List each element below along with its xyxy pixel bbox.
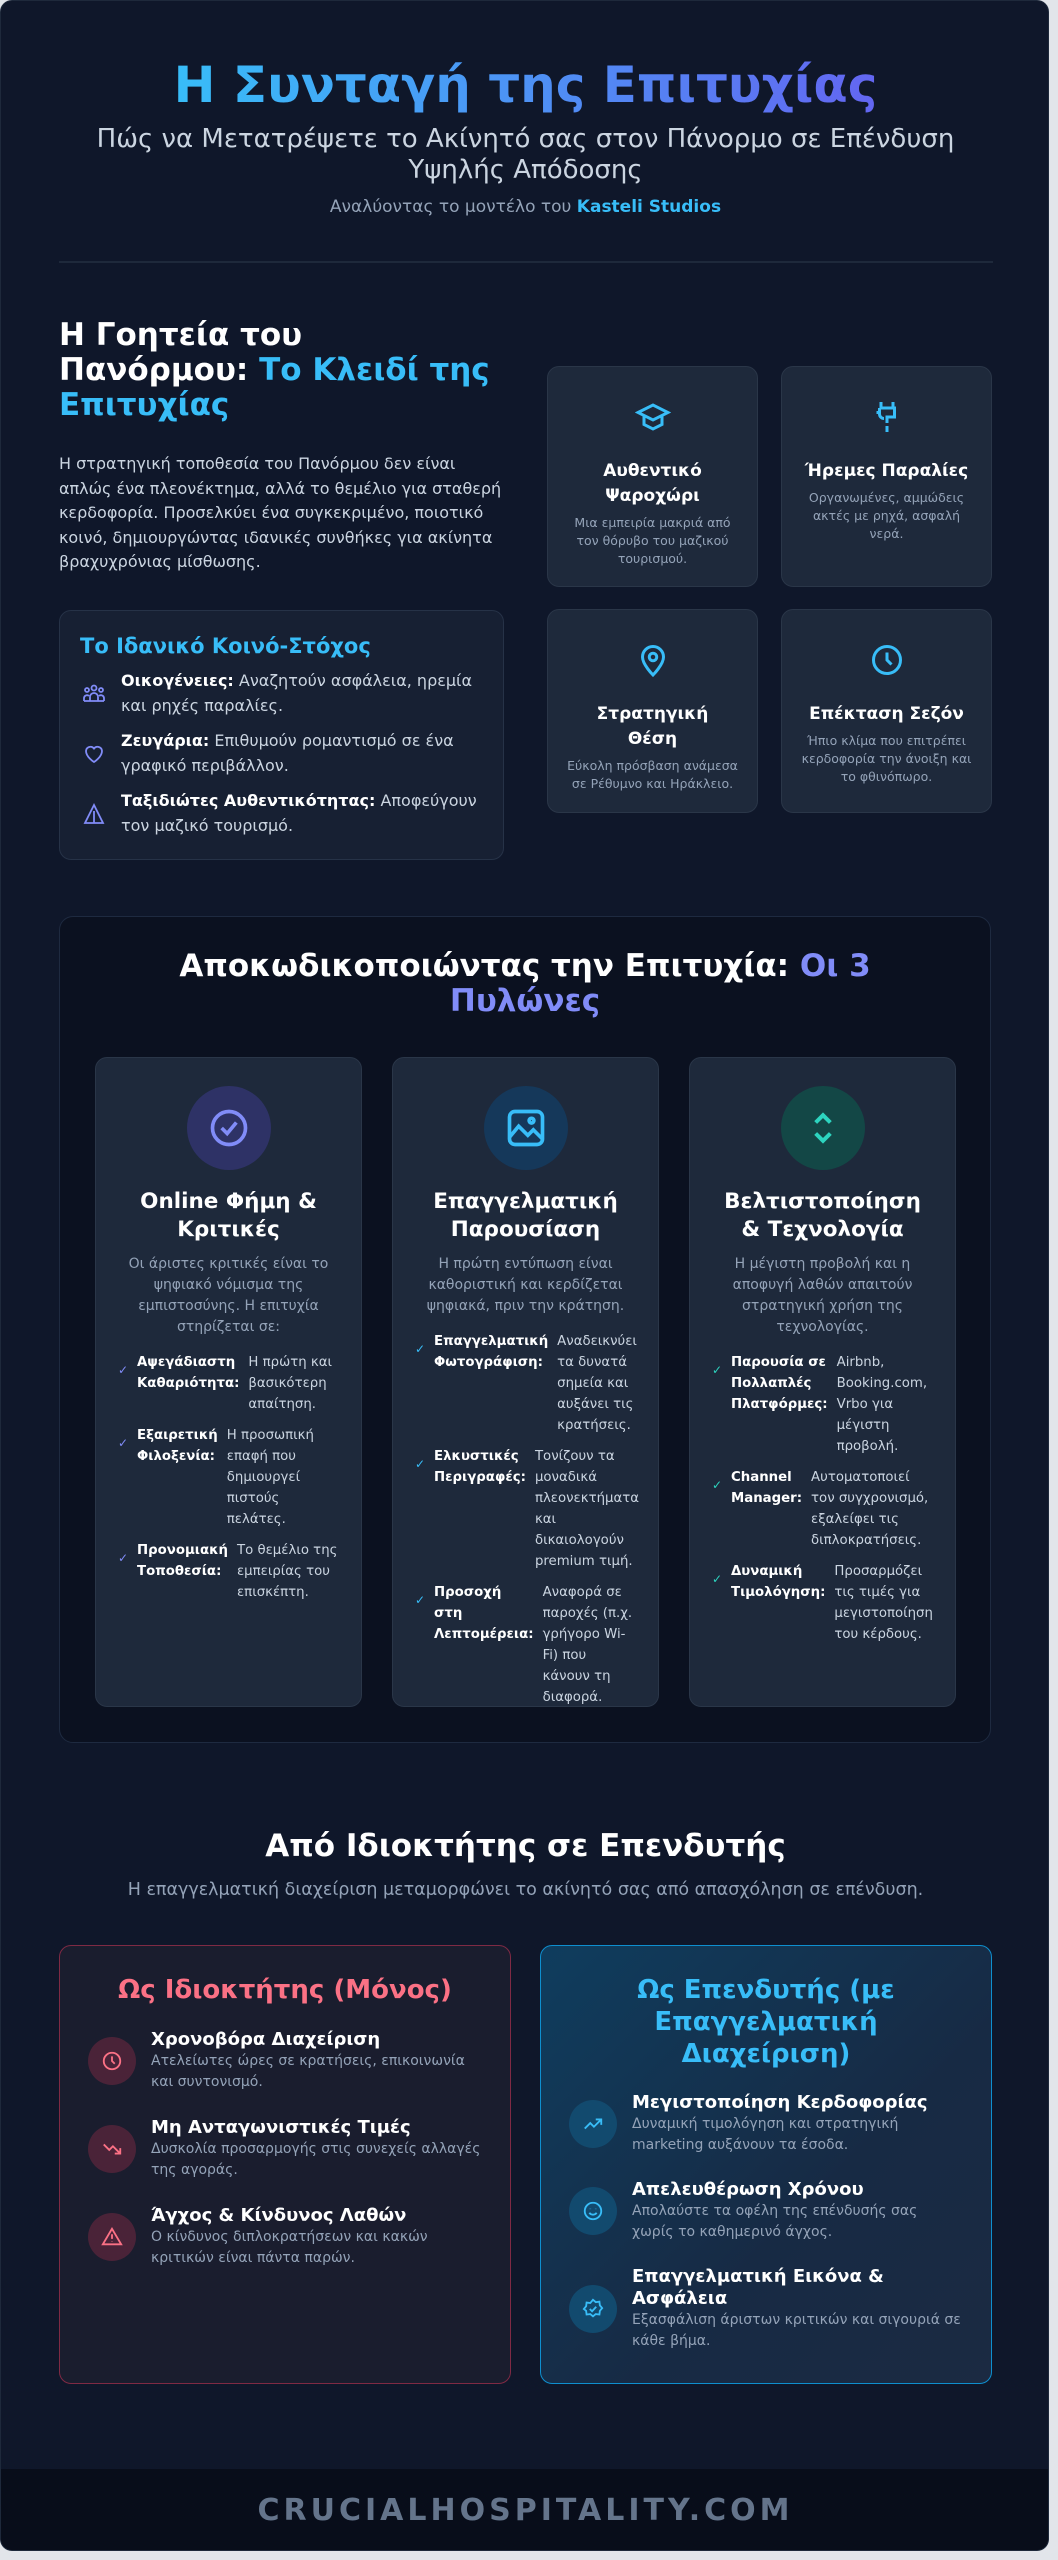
- pillar: technology: Δυναμική Τιμολόγηση:: [731, 1564, 825, 1600]
- item: prices: Δυσκολία προσαρμογής στις συνεχείς αλλαγές της αγοράς.: [151, 2141, 480, 2178]
- item: free time: Απελευθέρωση Χρόνου: [632, 2179, 864, 2200]
- item: free time: [569, 2179, 917, 2240]
- pillar: presentation: [392, 1057, 659, 1707]
- item: time consuming: Ατελείωτες ώρες σε κρατήσεις, επικοινωνία και συντονισμό.: [151, 2053, 465, 2090]
- pillar: presentation: ✓: [415, 1342, 425, 1356]
- card: authentic village: Αυθεντικό Ψαροχώρι: [603, 461, 702, 506]
- icon: cap: [635, 403, 671, 431]
- pillar: presentation: ✓: [415, 1593, 425, 1607]
- pillar: reputation: Η προσωπική επαφή που δημιουργεί πιστούς πελάτες.: [227, 1428, 314, 1527]
- card: authentic village: [547, 366, 758, 587]
- icon: image: [484, 1086, 568, 1170]
- heading: owner to investor: Από Ιδιοκτήτης σε Επενδυτής: [265, 1828, 786, 1864]
- pillar: technology: ✓: [712, 1572, 722, 1586]
- item: image & safety: [569, 2266, 961, 2349]
- pillar: technology: Channel Manager:: [731, 1470, 802, 1506]
- item: authentic travellers: Ταξιδιώτες Αυθεντικότητας: Αποφεύγουν τον μαζικό τουρισμό.: [121, 791, 477, 834]
- pillar: technology: Προσαρμόζει τις τιμές για μεγιστοποίηση του κέρδους.: [834, 1564, 933, 1642]
- icon: shower: [876, 402, 896, 432]
- card: strategic location: Θέση: [628, 729, 677, 749]
- icon: clock: [872, 645, 902, 675]
- pillar: technology: ✓: [712, 1363, 722, 1377]
- panel: as owner: [59, 1945, 511, 2384]
- card: calm beaches: Οργανωμένες, αμμώδεις ακτές με ρηχά, ασφαλή νερά.: [809, 490, 964, 541]
- pillar: presentation: Αναφορά σε παροχές (π.χ. γρήγορο Wi-Fi) που κάνουν τη διαφορά.: [543, 1585, 632, 1705]
- footer: CRUCIALHOSPITALITY.COM: [258, 2493, 793, 2528]
- pillar: reputation: Αψεγάδιαστη Καθαριότητα:: [137, 1355, 239, 1391]
- card: strategic location: Στρατηγική: [597, 704, 708, 724]
- audience heading: Το Ιδανικό Κοινό-Στόχος: [80, 634, 371, 658]
- item: free time: Απολαύστε τα οφέλη της επένδυσής σας χωρίς το καθημερινό άγχος.: [632, 2203, 917, 2240]
- card: strategic location: Εύκολη πρόσβαση ανάμεσα σε Ρέθυμνο και Ηράκλειο.: [567, 758, 738, 791]
- intro paragraph: Η στρατηγική τοποθεσία του Πανόρμου δεν είναι απλώς ένα πλεονέκτημα, αλλά το θεμέλιο για σταθερή κερδοφορία. Προσελκύει ένα συγκεκριμένο, ποιοτικό κοινό, δημιουργώντας ιδανικές συνθήκες για ακίνητα βραχυχρόνιας μίσθωσης.: [59, 454, 501, 571]
- item: profit: Μεγιστοποίηση Κερδοφορίας: [632, 2092, 928, 2113]
- pillar: technology: Airbnb, Booking.com, Vrbo για μέγιστη προβολή.: [837, 1355, 927, 1454]
- card: strategic location: [547, 609, 758, 813]
- item: families: Οικογένειες: Αναζητούν ασφάλεια, ηρεμία και ρηχές παραλίες.: [121, 671, 472, 714]
- card: season extension: Ήπιο κλίμα που επιτρέπει κερδοφορία την άνοιξη και το φθινόπωρο.: [802, 733, 971, 784]
- item: stress: [88, 2205, 428, 2266]
- pillar: technology: Αυτοματοποιεί τον συγχρονισμό, εξαλείφει τις διπλοκρατήσεις.: [811, 1470, 928, 1548]
- heading: charm of Panormos: Πανόρμου: Το Κλειδί της: [59, 352, 490, 388]
- card: calm beaches: [781, 366, 992, 587]
- heading: charm of Panormos: Επιτυχίας: [59, 387, 229, 423]
- panel: three pillars: [59, 916, 991, 1743]
- pillars heading: Αποκωδικοποιώντας την Επιτυχία: Οι 3 Πυλώνες: [179, 948, 871, 1019]
- panel: as investor: Ως Επενδυτής (με Επαγγελματική Διαχείριση): [637, 1975, 895, 2069]
- pillar: presentation: ✓: [415, 1457, 425, 1471]
- subheading: Η επαγγελματική διαχείριση μεταμορφώνει το ακίνητό σας από απασχόληση σε επένδυση.: [128, 1880, 923, 1900]
- panel: target audience: [59, 610, 504, 860]
- pillar: reputation: Προνομιακή Τοποθεσία:: [137, 1543, 228, 1579]
- icon: check circle: [186, 1086, 270, 1170]
- item: time consuming: Χρονοβόρα Διαχείριση: [151, 2029, 380, 2050]
- item: time consuming: [88, 2029, 465, 2090]
- pillar: presentation: Επαγγελματική Παρουσίαση: [433, 1189, 618, 1242]
- pillar: reputation: Online Φήμη & Κριτικές: [140, 1189, 317, 1242]
- pillar: reputation: [95, 1057, 362, 1707]
- title: Η Συνταγή της Επιτυχίας: [174, 56, 877, 114]
- pillar: technology: Βελτιστοποίηση & Τεχνολογία: [724, 1189, 921, 1242]
- icon: pin: [641, 645, 665, 677]
- pillar: presentation: Η πρώτη εντύπωση είναι καθοριστική και κερδίζεται ψηφιακά, πριν την κράτηση.: [427, 1256, 624, 1314]
- item: prices: [88, 2117, 480, 2178]
- pillar: technology: ✓: [712, 1478, 722, 1492]
- item: image & safety: Εξασφάλιση άριστων κριτικών και σιγουριά σε κάθε βήμα.: [632, 2312, 961, 2349]
- card: season extension: Επέκταση Σεζόν: [809, 704, 964, 724]
- pillar: technology: [689, 1057, 956, 1707]
- byline: Αναλύοντας το μοντέλο του Kasteli Studios: [330, 197, 721, 217]
- pillar: reputation: ✓: [118, 1363, 128, 1377]
- icon: up-down: [780, 1086, 864, 1170]
- pillar: reputation: Οι άριστες κριτικές είναι το ψηφιακό νόμισμα της εμπιστοσύνης. Η επιτυχία στηρίζεται σε:: [129, 1256, 328, 1335]
- pillar: presentation: Αναδεικνύει τα δυνατά σημεία και αυξάνει τις κρατήσεις.: [557, 1334, 637, 1433]
- pillar: reputation: Το θεμέλιο της εμπειρίας του επισκέπτη.: [237, 1543, 337, 1600]
- item: stress: Άγχος & Κίνδυνος Λαθών: [151, 2205, 406, 2226]
- item: prices: Μη Ανταγωνιστικές Τιμές: [151, 2117, 411, 2138]
- heading: charm of Panormos: [59, 317, 490, 423]
- card: season extension: [781, 609, 992, 813]
- pillar: presentation: Ελκυστικές Περιγραφές:: [434, 1449, 526, 1485]
- pillar: technology: Η μέγιστη προβολή και η αποφυγή λαθών απαιτούν στρατηγική χρήση της τεχνολογίας.: [733, 1256, 912, 1335]
- panel: as owner: Ως Ιδιοκτήτης (Μόνος): [118, 1975, 452, 2005]
- item: image & safety: Επαγγελματική Εικόνα & Ασφάλεια: [632, 2266, 884, 2309]
- panel: as investor: [540, 1945, 992, 2384]
- pillar: reputation: ✓: [118, 1551, 128, 1565]
- item: profit: [569, 2092, 928, 2153]
- pillar: presentation: Τονίζουν τα μοναδικά πλεονεκτήματα και δικαιολογούν premium τιμή.: [535, 1449, 639, 1569]
- heading: charm of Panormos: Η Γοητεία του: [59, 317, 302, 353]
- pillar: technology: Παρουσία σε Πολλαπλές Πλατφόρμες:: [731, 1355, 828, 1412]
- card: authentic village: Μια εμπειρία μακριά από τον θόρυβο του μαζικού τουρισμού.: [574, 515, 731, 566]
- item: profit: Δυναμική τιμολόγηση και στρατηγική marketing αυξάνουν τα έσοδα.: [632, 2116, 898, 2153]
- item: stress: Ο κίνδυνος διπλοκρατήσεων και κακών κριτικών είναι πάντα παρών.: [151, 2229, 428, 2266]
- subtitle: Πώς να Μετατρέψετε το Ακίνητό σας στον Πάνορμο σε Επένδυση Υψηλής Απόδοσης: [97, 124, 954, 185]
- item: couples: Ζευγάρια: Επιθυμούν ρομαντισμό σε ένα γραφικό περιβάλλον.: [121, 731, 454, 774]
- pillar: reputation: Εξαιρετική Φιλοξενία:: [137, 1428, 218, 1464]
- pillar: reputation: Η πρώτη και βασικότερη απαίτηση.: [248, 1355, 332, 1412]
- footer: [1, 2469, 1050, 2552]
- pillar: reputation: ✓: [118, 1436, 128, 1450]
- pillar: presentation: Προσοχή στη Λεπτομέρεια:: [434, 1585, 534, 1642]
- pillar: presentation: Επαγγελματική Φωτογράφιση:: [434, 1334, 548, 1370]
- card: calm beaches: Ήρεμες Παραλίες: [805, 461, 968, 481]
